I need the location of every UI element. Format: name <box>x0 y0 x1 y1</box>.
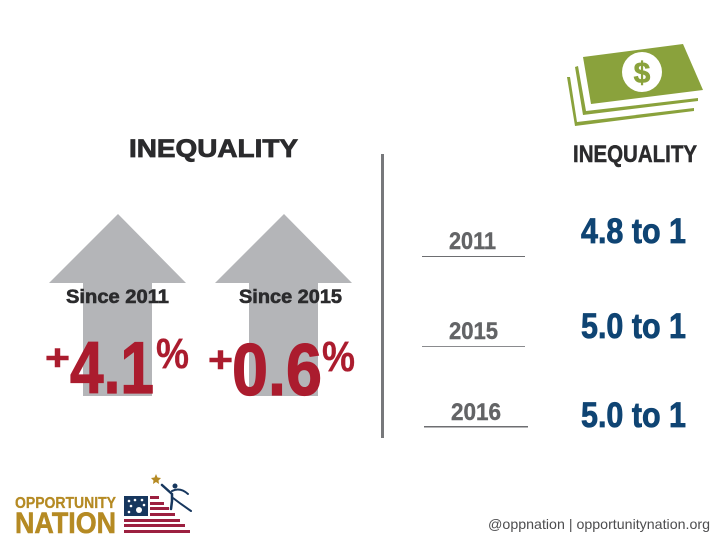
row: 2011 <box>422 212 686 257</box>
label: since 2011: Since 2011 <box>66 287 169 308</box>
row: 2015 <box>422 307 686 347</box>
row: 2011: 2011 <box>449 228 496 255</box>
row: 2016: 2016 <box>451 399 501 426</box>
stat: +0.6%: % <box>322 333 355 381</box>
stat: +0.6%: + <box>208 339 233 380</box>
logo: opportunity nation: OPPORTUNITY <box>15 495 116 512</box>
row: 2011: 4.8 to 1 <box>581 212 686 251</box>
stat: +0.6% <box>208 330 355 411</box>
stat: +4.1%: 4.1 <box>70 328 154 409</box>
icon: money stack <box>567 44 703 126</box>
stat: +0.6%: 0.6 <box>232 330 322 411</box>
arrow: up 2015 <box>215 214 352 396</box>
icon: money stack: $ <box>634 57 651 90</box>
stat: +4.1%: % <box>156 330 189 378</box>
panel: since 2015 <box>208 214 355 411</box>
row: 2015: 2015 <box>449 318 498 345</box>
arrow: up 2011 <box>49 214 186 396</box>
stat: +4.1%: + <box>45 337 70 378</box>
panel: since 2011 <box>45 214 189 409</box>
title: INEQUALITY <box>129 135 298 163</box>
row: 2016: 5.0 to 1 <box>581 396 686 435</box>
logo: opportunity nation <box>15 474 191 540</box>
row: 2015: 5.0 to 1 <box>581 307 686 346</box>
icon label: inequality: INEQUALITY <box>573 141 697 168</box>
vertical divider <box>381 154 384 438</box>
footer: handle and url: @oppnation | opportunitynation.org <box>488 516 710 532</box>
row: 2016 <box>424 396 686 435</box>
label: since 2015: Since 2015 <box>239 287 342 308</box>
logo: opportunity nation: NATION <box>15 507 116 540</box>
